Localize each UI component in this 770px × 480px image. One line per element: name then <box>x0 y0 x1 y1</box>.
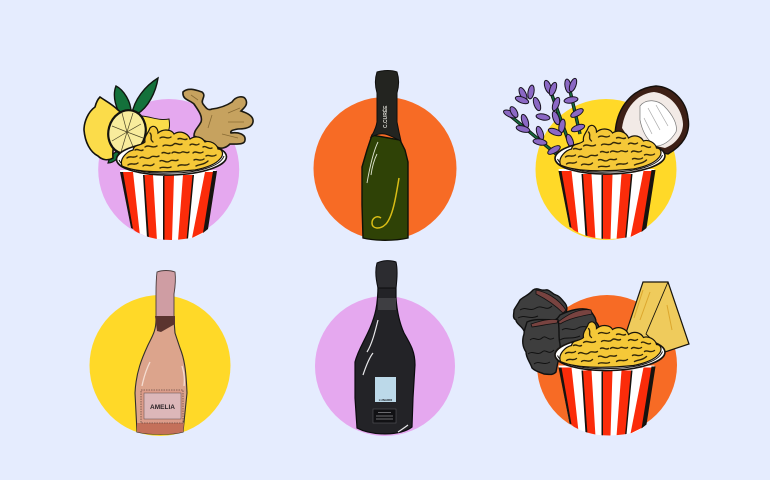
icon: left leaf <box>114 86 131 118</box>
bottle: black bottle <box>355 261 415 434</box>
panel: rosé sparkling wine bottle <box>90 270 230 436</box>
bottle: green J bottle <box>362 70 408 240</box>
icon: whole lemon <box>84 97 125 160</box>
prune three <box>553 309 599 347</box>
bottle highlights <box>367 142 378 183</box>
lower label <box>373 409 396 423</box>
popcorn bucket <box>555 125 665 240</box>
blue label: LUNARDI <box>379 398 392 402</box>
foil text: C.CURÉE <box>381 105 389 128</box>
bottle highlights <box>363 320 408 432</box>
popcorn bucket <box>116 126 227 241</box>
coconut inner <box>622 92 683 148</box>
foil capsule <box>156 270 175 318</box>
blue label <box>375 377 396 402</box>
panel: lemon and ginger popcorn <box>84 78 253 241</box>
bottle base <box>137 423 184 434</box>
icon: lavender sprigs <box>502 77 586 156</box>
yellow circle <box>536 99 676 240</box>
panel: black sparkling wine bottle <box>315 261 455 436</box>
yellow J logo <box>372 178 399 228</box>
yellow circle <box>90 295 230 436</box>
orange circle <box>537 295 677 435</box>
foil capsule <box>376 261 397 288</box>
icon: right leaf <box>132 78 158 114</box>
bottle body <box>362 135 408 240</box>
popcorn bucket <box>555 322 665 436</box>
prune one <box>514 289 567 333</box>
icon: cheese wedge <box>626 282 689 352</box>
label <box>141 390 183 423</box>
orange circle <box>314 97 456 240</box>
foil capsule <box>371 70 401 141</box>
neck band <box>378 298 396 310</box>
panel: prune and cheese popcorn <box>514 282 689 436</box>
bottle body <box>355 284 415 434</box>
label: AMELIA <box>150 404 175 411</box>
icon: lemon behind <box>140 116 170 136</box>
bottle: Amelia rosé <box>135 270 187 434</box>
icon: ginger root <box>183 89 253 148</box>
bottle body <box>135 320 187 434</box>
icon: prunes <box>514 289 599 374</box>
panel: green sparkling wine bottle <box>314 70 456 240</box>
coconut flesh <box>640 101 676 146</box>
prune two <box>523 320 560 374</box>
bottle highlights <box>142 362 184 386</box>
neck band <box>155 316 175 332</box>
icon: coconut <box>615 86 689 154</box>
pink circle <box>315 296 455 436</box>
panel: lavender and coconut popcorn <box>502 77 689 240</box>
coconut shell <box>615 86 689 154</box>
icon: small leaf <box>108 151 119 163</box>
icon: lemon slice <box>103 106 151 158</box>
pink circle <box>98 99 239 240</box>
